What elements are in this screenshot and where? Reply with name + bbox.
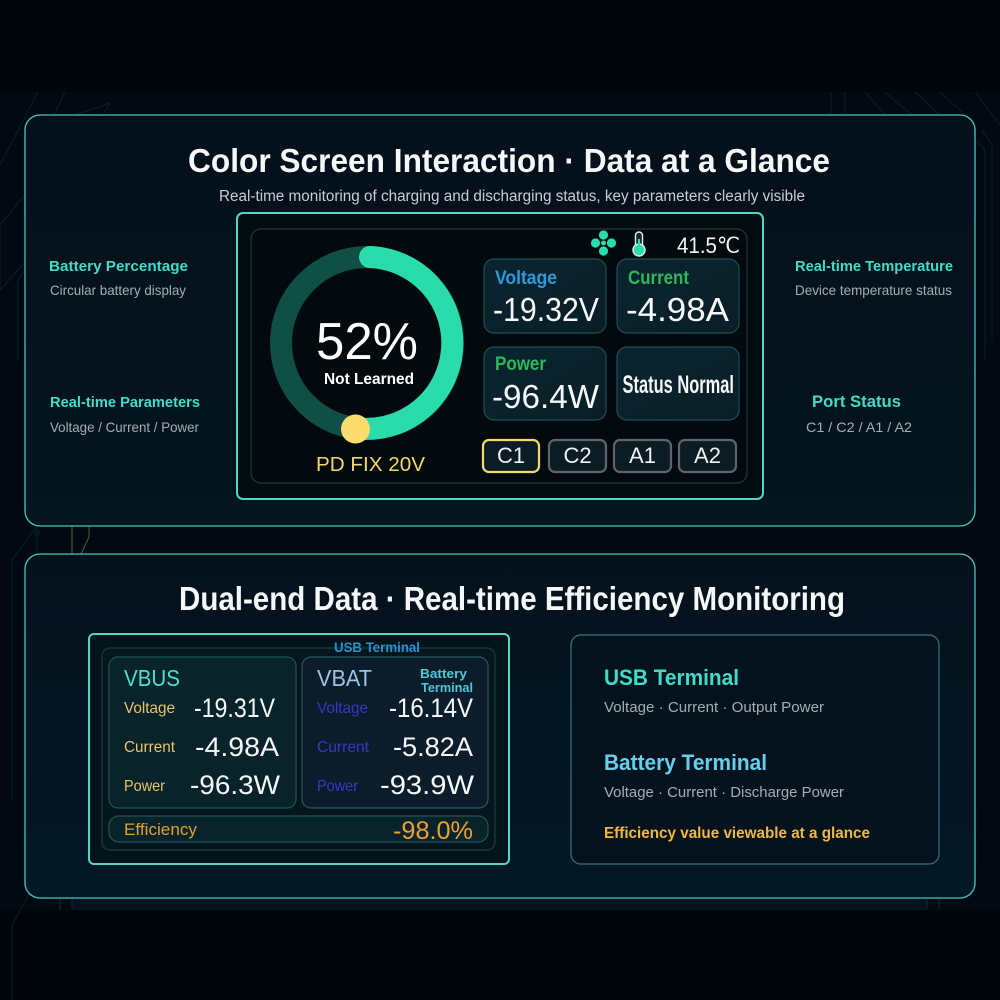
card: status	[617, 347, 739, 420]
info card: terminals: Battery Terminal	[604, 750, 767, 775]
callout: battery percentage	[49, 258, 188, 298]
info card: terminals: Voltage · Current · Discharge Power	[604, 785, 844, 801]
subheading: Real-time monitoring of charging and discharging status, key parameters clearly visible	[219, 188, 805, 205]
callout: port status: Port Status	[812, 393, 901, 411]
card: vbat: -5.82A	[393, 732, 473, 762]
card: vbus: -96.3W	[190, 770, 281, 800]
card: vbus: Current	[124, 739, 176, 756]
card: vbat	[302, 657, 488, 808]
battery status: Not Learned	[324, 371, 414, 388]
heading: dual-end: Dual-end Data · Real-time Efficiency Monitoring	[179, 580, 845, 617]
port buttons: C1	[497, 443, 525, 468]
card: voltage	[484, 259, 606, 333]
info card: terminals: Efficiency value viewable at a glance	[604, 825, 870, 842]
card: current: Current	[628, 268, 690, 289]
port buttons	[483, 440, 736, 472]
card: voltage: -19.32V	[493, 291, 599, 328]
card: power: -96.4W	[492, 378, 600, 415]
panel: color screen interaction	[25, 115, 975, 526]
device screen: main display	[237, 213, 763, 499]
callout: real-time temperature: Device temperature status	[795, 282, 952, 298]
card: status: Status Normal	[622, 371, 734, 399]
callout: real-time temperature	[795, 258, 953, 298]
card: vbat: -16.14V	[389, 693, 473, 723]
card: vbus: VBUS	[124, 665, 180, 691]
card: vbus: -4.98A	[195, 732, 279, 762]
callout: battery percentage: Circular battery display	[50, 282, 186, 298]
card: current: -4.98A	[626, 291, 729, 328]
efficiency bar: Efficiency	[124, 820, 197, 839]
callout: battery percentage: Battery Percentage	[49, 258, 188, 275]
card: vbat: Power	[317, 778, 359, 795]
card: vbus: Voltage	[124, 700, 175, 717]
port buttons: A1	[629, 443, 656, 468]
temperature value: 41.5℃	[677, 233, 740, 258]
callout: real-time parameters	[50, 394, 200, 435]
icon: thermometer	[633, 232, 645, 256]
card: vbat: Current	[317, 739, 370, 756]
battery percentage value: 52%	[316, 313, 418, 371]
efficiency bar	[109, 816, 488, 845]
card: voltage: Voltage	[495, 268, 557, 289]
card: vbat: Voltage	[317, 700, 368, 717]
callout: real-time parameters: Real-time Parameters	[50, 394, 200, 411]
label: usb terminal: USB Terminal	[334, 640, 420, 655]
card: vbat: -93.9W	[380, 770, 475, 800]
callout: real-time parameters: Voltage / Current / Power	[50, 419, 199, 435]
port buttons: A2	[694, 443, 721, 468]
card: vbat: VBAT	[317, 665, 372, 691]
device screen: efficiency display	[89, 634, 509, 864]
card: vbat: Battery	[420, 666, 468, 681]
card: current	[617, 259, 739, 333]
card: power	[484, 347, 606, 420]
charge mode: PD FIX 20V	[316, 454, 426, 476]
efficiency bar: -98.0%	[393, 817, 473, 845]
card: power: Power	[495, 354, 547, 375]
callout: port status: C1 / C2 / A1 / A2	[806, 419, 912, 435]
card: vbus: -19.31V	[194, 693, 275, 723]
icon: fan	[591, 230, 616, 256]
card: vbat: Terminal	[421, 680, 473, 695]
port buttons: C2	[563, 443, 592, 468]
info card: terminals	[571, 635, 939, 864]
card: vbus: Power	[124, 778, 166, 795]
card: vbus	[109, 657, 296, 808]
info card: terminals: USB Terminal	[604, 665, 739, 690]
panel: dual-end data	[25, 554, 975, 898]
battery ring	[281, 257, 453, 444]
info card: terminals: Voltage · Current · Output Power	[604, 700, 824, 716]
heading: color screen: Color Screen Interaction · Data at a Glance	[188, 142, 830, 179]
callout: port status	[806, 393, 912, 435]
callout: real-time temperature: Real-time Temperature	[795, 258, 953, 275]
